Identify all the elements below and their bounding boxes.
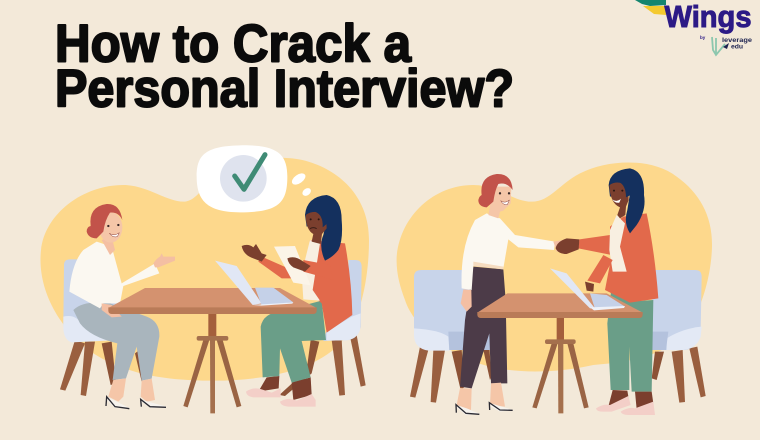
woman right: legs and shoes: [246, 301, 326, 407]
woman right: jacket and paper: [242, 240, 352, 333]
title: How to Crack a: [55, 14, 411, 74]
woman left: head: [478, 174, 513, 218]
logo: Wings by leverage edu: [635, 0, 752, 55]
woman left: legs: [73, 302, 167, 409]
right chair: [648, 270, 706, 403]
laptop left: [215, 261, 293, 306]
woman right: legs and shoes: [596, 272, 655, 415]
woman left: torso and arm: [461, 213, 572, 312]
title: [55, 14, 514, 118]
woman right: jacket and shirt: [556, 213, 658, 303]
left chair: [410, 270, 492, 403]
left chair: [60, 259, 144, 396]
background blob right: [397, 162, 712, 371]
scene: interview at table: [40, 145, 369, 413]
scene: handshake: [397, 162, 712, 415]
woman left: legs and shoes: [455, 267, 513, 415]
woman right: head and hair: [609, 168, 645, 233]
table right: [477, 293, 643, 413]
right chair: [279, 260, 366, 396]
logo: Wings by leverage edu: Wings: [664, 0, 752, 34]
logo: Wings by leverage edu: leverage: [722, 37, 752, 44]
laptop right: [550, 268, 625, 310]
logo: Wings by leverage edu: edu: [731, 44, 743, 50]
woman right: head and hair: [305, 195, 342, 261]
title: Personal Interview?: [55, 60, 514, 118]
background blob left: [40, 158, 369, 381]
logo: Wings by leverage edu: by: [700, 35, 706, 40]
woman left: head: [87, 204, 122, 243]
speech bubble with check mark: [197, 145, 312, 212]
table left: [108, 288, 317, 413]
woman left: torso and arm: [69, 237, 175, 317]
